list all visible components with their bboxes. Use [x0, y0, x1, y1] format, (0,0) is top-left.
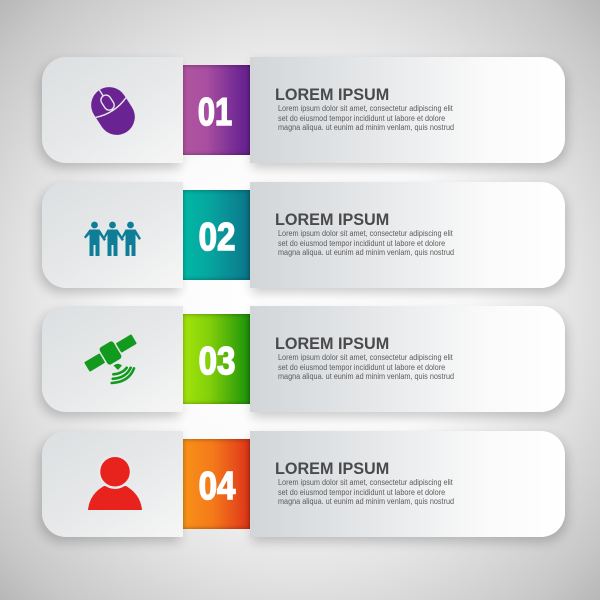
text block: magna aliqua. ut eunim ad minim venlam, quis nostrud: [278, 123, 454, 132]
icon: person: [88, 457, 142, 510]
icon: computer mouse: [91, 87, 135, 135]
text block: magna aliqua. ut eunim ad minim venlam, quis nostrud: [278, 248, 454, 257]
panel: text card 3: [250, 306, 565, 412]
row 4: person: [34, 431, 572, 547]
number 03: 03: [199, 340, 235, 383]
row 3: satellite: [34, 306, 572, 422]
icon: three people: [84, 222, 141, 256]
number 04: 04: [199, 465, 235, 508]
text block: [278, 478, 454, 506]
heading: LOREM IPSUM: [275, 460, 389, 478]
panel: text card 4: [250, 431, 565, 537]
text block: set do eiusmod tempor incididunt ut labore et dolore: [278, 239, 445, 248]
text block: Lorem ipsum dolor sit amet, consectetur adipiscing elit: [278, 353, 453, 362]
icon: satellite: [84, 334, 137, 384]
panel: icon card 2: [42, 182, 183, 288]
row 2: people: [34, 182, 572, 298]
panel: number block 01: [183, 65, 250, 155]
panel: text card 1: [250, 57, 565, 163]
panel: number block 02: [183, 190, 250, 280]
panel: icon card 4: [42, 431, 183, 537]
text block: [278, 104, 454, 132]
text block: set do eiusmod tempor incididunt ut labore et dolore: [278, 363, 445, 372]
panel: number block 03: [183, 314, 250, 404]
text block: set do eiusmod tempor incididunt ut labore et dolore: [278, 488, 445, 497]
text block: [278, 353, 454, 381]
panel: text card 2: [250, 182, 565, 288]
text block: Lorem ipsum dolor sit amet, consectetur adipiscing elit: [278, 229, 453, 238]
text block: magna aliqua. ut eunim ad minim venlam, quis nostrud: [278, 372, 454, 381]
heading: LOREM IPSUM: [275, 334, 389, 352]
text block: Lorem ipsum dolor sit amet, consectetur adipiscing elit: [278, 478, 453, 487]
number 01: 01: [198, 91, 232, 134]
text block: Lorem ipsum dolor sit amet, consectetur adipiscing elit: [278, 104, 453, 113]
number 02: 02: [199, 216, 235, 259]
panel: number block 04: [183, 439, 250, 529]
row 1: mouse: [34, 57, 572, 173]
heading: LOREM IPSUM: [275, 210, 389, 228]
panel: icon card 1: [42, 57, 183, 163]
panel: icon card 3: [42, 306, 183, 412]
text block: magna aliqua. ut eunim ad minim venlam, quis nostrud: [278, 497, 454, 506]
text block: set do eiusmod tempor incididunt ut labore et dolore: [278, 114, 445, 123]
text block: [278, 229, 454, 257]
heading: LOREM IPSUM: [275, 86, 389, 104]
